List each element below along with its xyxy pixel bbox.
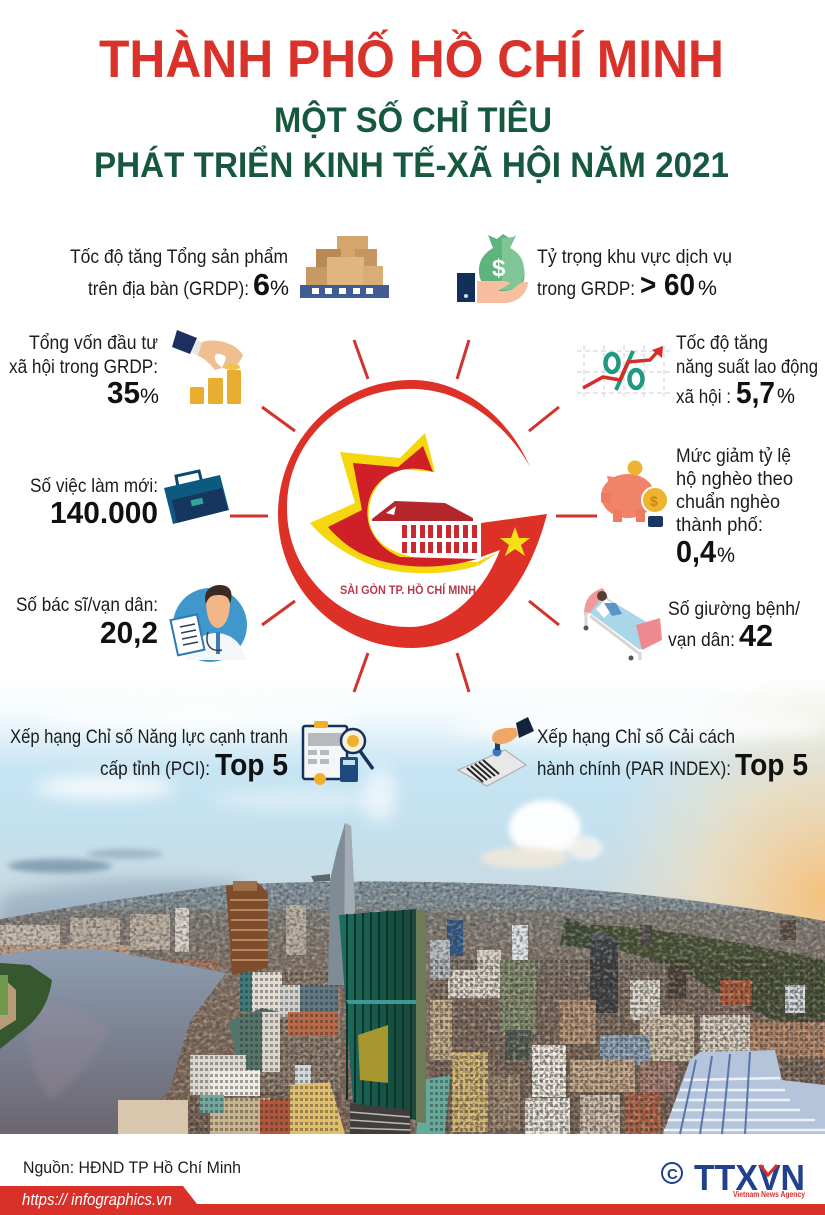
text with value: cấp tỉnh (PCI): xyxy=(100,758,210,780)
item: poverty reduction xyxy=(601,445,793,569)
star inner red xyxy=(328,446,477,567)
text: Số việc làm mới: xyxy=(30,475,158,497)
text: Tỷ trọng khu vực dịch vụ xyxy=(537,246,732,268)
TTXVN logo: Vietnam News Agency xyxy=(733,1190,805,1199)
text with value xyxy=(88,267,289,302)
item: new jobs xyxy=(30,471,229,530)
text with value: xã hội : xyxy=(676,386,731,408)
text with value xyxy=(537,747,808,782)
text with value: vạn dân: xyxy=(668,629,735,651)
roof xyxy=(372,501,473,521)
icon: stamp on paper xyxy=(458,717,534,786)
item: productivity xyxy=(577,332,818,410)
item: GRDP growth xyxy=(70,236,389,302)
title: THÀNH PHỐ HỒ CHÍ MINH xyxy=(99,29,724,89)
text with value: % xyxy=(777,385,795,408)
icon: money bag in hand xyxy=(457,234,528,303)
subtitle line 2: PHÁT TRIỂN KINH TẾ-XÃ HỘI NĂM 2021 xyxy=(94,145,729,185)
text with value: % xyxy=(270,277,289,300)
right foreground tower xyxy=(663,1050,825,1134)
yellow streak xyxy=(477,551,500,566)
text with value: 42 xyxy=(739,618,773,653)
value: 0,4 xyxy=(676,534,717,569)
TTXVN logo: TTXVN xyxy=(694,1157,805,1198)
icon: piggy bank: $ xyxy=(650,493,658,509)
text with value: trong GRDP: xyxy=(537,278,635,300)
river xyxy=(0,949,226,1134)
text with value: trên địa bàn (GRDP): xyxy=(88,278,249,300)
noise xyxy=(0,878,825,1134)
icon: document with magnifier xyxy=(303,721,373,785)
value: 140.000 xyxy=(50,495,158,530)
star outline yellow xyxy=(310,433,477,573)
city photo panel xyxy=(0,680,825,1134)
icon: money bag in hand: $ xyxy=(492,255,506,282)
icon: doctor xyxy=(171,585,247,662)
Bitexco tower xyxy=(311,823,355,985)
value: % xyxy=(140,385,159,408)
text with value xyxy=(537,267,717,302)
item: PCI xyxy=(10,721,373,785)
header: titles xyxy=(94,29,729,185)
text: Tốc độ tăng Tổng sản phẩm xyxy=(70,246,288,268)
flag star xyxy=(500,527,530,556)
item: investment xyxy=(9,330,243,410)
central logo xyxy=(278,380,547,648)
icon: hospital bed xyxy=(584,588,662,660)
text with value xyxy=(668,618,773,653)
value: 20,2 xyxy=(100,615,158,650)
text with value: Top 5 xyxy=(735,747,808,782)
red band xyxy=(0,1186,825,1215)
text with value: 6 xyxy=(253,267,270,302)
windows xyxy=(402,525,477,553)
text: Tổng vốn đầu tư xyxy=(29,332,158,354)
source: Nguồn: HĐND TP Hồ Chí Minh xyxy=(23,1158,241,1177)
text with value xyxy=(100,747,288,782)
value: % xyxy=(717,544,735,567)
copyright mark xyxy=(662,1163,682,1183)
text: Xếp hạng Chỉ số Cải cách xyxy=(537,726,735,748)
text: xã hội trong GRDP: xyxy=(9,356,158,378)
text with value: hành chính (PAR INDEX): xyxy=(537,758,731,780)
green tower xyxy=(339,909,426,1134)
text with value: % xyxy=(698,277,717,300)
sky xyxy=(0,680,825,930)
icon: hand with coins xyxy=(172,330,243,404)
item: service share xyxy=(457,234,732,303)
G ring xyxy=(278,380,547,648)
text: thành phố: xyxy=(676,514,763,536)
logo caption: SÀI GÒN TP. HỒ CHÍ MINH xyxy=(340,582,476,597)
value xyxy=(107,375,159,410)
brown tower xyxy=(226,881,268,975)
text: Mức giảm tỷ lệ xyxy=(676,445,791,467)
item: doctors xyxy=(16,585,247,662)
value: 35 xyxy=(107,375,140,410)
text: hộ nghèo theo xyxy=(676,468,793,490)
text with value: 5,7 xyxy=(736,375,775,410)
copyright mark: C xyxy=(667,1166,678,1183)
text with value: > 60 xyxy=(640,267,695,302)
item: PAR index xyxy=(458,717,808,786)
foreground mid-rise buildings xyxy=(118,960,825,1134)
text: Số bác sĩ/vạn dân: xyxy=(16,594,158,616)
icon: percent chart xyxy=(577,345,670,397)
rays xyxy=(230,340,597,692)
text: Tốc độ tăng xyxy=(676,332,768,354)
website: https:// infographics.vn xyxy=(22,1190,172,1209)
text with value: Top 5 xyxy=(215,747,288,782)
item: hospital beds xyxy=(584,588,801,660)
subtitle line 1: MỘT SỐ CHỈ TIÊU xyxy=(274,100,552,140)
cityscape xyxy=(0,878,825,1134)
icon: piggy bank xyxy=(601,460,668,527)
text: Xếp hạng Chỉ số Năng lực cạnh tranh xyxy=(10,726,288,748)
text: Số giường bệnh/ xyxy=(668,598,801,620)
footer xyxy=(0,1157,825,1215)
icon: briefcase xyxy=(164,471,229,524)
text: chuẩn nghèo xyxy=(676,491,780,513)
text with value xyxy=(676,375,795,410)
icon: boxes on conveyor xyxy=(300,236,389,298)
